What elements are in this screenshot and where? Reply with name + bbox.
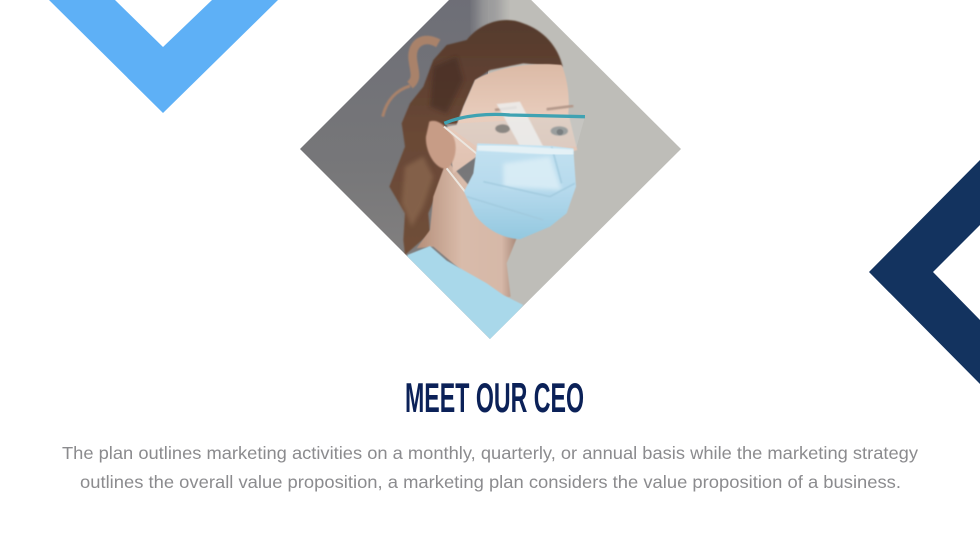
face — [426, 64, 577, 173]
hair — [389, 20, 563, 255]
navy chevron — [869, 160, 980, 384]
ear — [426, 121, 456, 169]
surgical mask — [464, 143, 576, 239]
line 1: The plan outlines marketing activities on a monthly, quarterly, or annual basis while the marketing strategy — [62, 443, 918, 463]
title: MEET OUR CEO — [405, 374, 584, 421]
neck and shoulder skin — [417, 160, 517, 298]
portrait photo in diamond frame — [290, 0, 688, 345]
line 2: outlines the overall value proposition, a marketing plan considers the value proposition of a business. — [80, 472, 901, 492]
scrubs — [407, 246, 523, 343]
lighter hair strands — [402, 157, 433, 227]
eyebrows — [495, 106, 573, 110]
light blue chevron — [49, 0, 278, 113]
eye left — [495, 124, 510, 133]
hair wisps — [383, 40, 438, 117]
eye right — [551, 126, 568, 136]
photo background — [290, 0, 688, 345]
ear loops — [444, 127, 478, 192]
body text — [62, 443, 918, 492]
face shield — [444, 101, 585, 146]
